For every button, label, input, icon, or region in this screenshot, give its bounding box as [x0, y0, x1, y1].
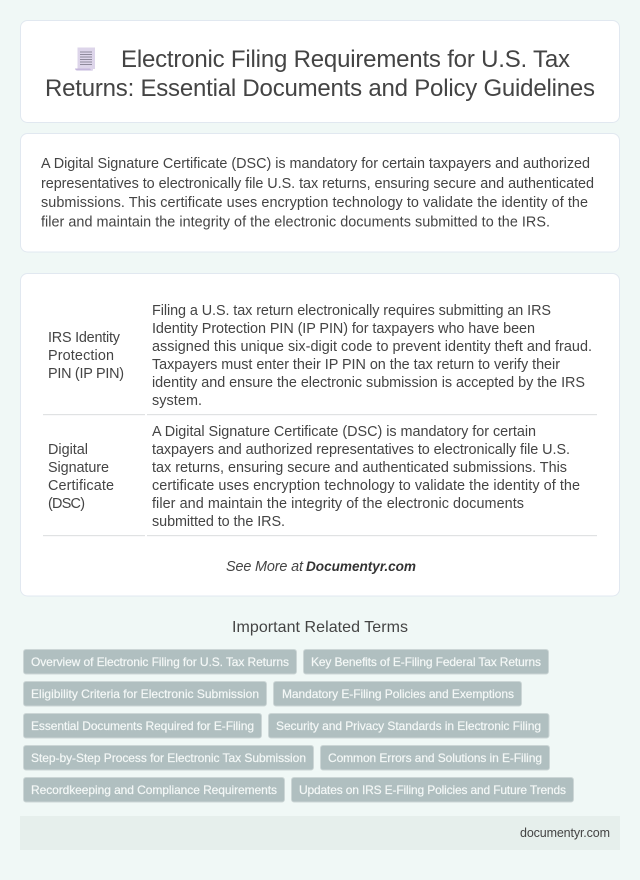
see more link: See More at [226, 559, 304, 575]
term: Digital Signature Certificate: Signature [48, 460, 109, 476]
description: Digital Signature Certificate: A Digital Signature Certificate (DSC) is mandatory for certain [152, 424, 536, 440]
description: Digital Signature Certificate: filer and maintain the integrity of the electronic documents [152, 496, 524, 512]
tag [268, 714, 549, 738]
tag: Updates on IRS E-Filing Policies and Future Trends [299, 783, 566, 797]
tag [292, 778, 574, 802]
description: Digital Signature Certificate: taxpayers and authorized representatives to electronically file U.S. [152, 442, 570, 458]
panel: introduction [20, 134, 620, 252]
title: Returns: Essential Documents and Policy Guidelines [45, 75, 595, 102]
intro paragraph: representatives to electronically file U.S. tax returns, ensuring secure and authenticated [41, 176, 594, 192]
description: Digital Signature Certificate: certificate uses encryption technology to validate the identity of the [152, 478, 580, 494]
panel: title card [20, 20, 620, 122]
description: Digital Signature Certificate: submitted to the IRS. [152, 514, 285, 530]
title: Electronic Filing Requirements for U.S. Tax [121, 46, 570, 73]
intro paragraph: submissions. This certificate uses encryption technology to validate the identity of the [41, 195, 588, 211]
term: Digital Signature Certificate: Digital [48, 442, 88, 458]
tag [304, 650, 548, 674]
see more link: Documentyr.com [306, 559, 416, 574]
tag [274, 682, 522, 706]
table row: Digital Signature Certificate [43, 424, 597, 536]
heading: related terms: Important Related Terms [232, 619, 408, 636]
term: Digital Signature Certificate: (DSC) [48, 496, 85, 512]
term: IRS Identity Protection PIN: IRS Identity [48, 330, 121, 346]
tag: Step-by-Step Process for Electronic Tax Submission [31, 751, 306, 765]
description: Digital Signature Certificate: tax returns, ensuring secure and authenticated submissions. This [152, 460, 567, 476]
tag [24, 650, 296, 674]
tag [320, 746, 550, 770]
title [45, 46, 595, 102]
icon: receipt document [75, 48, 95, 70]
term: Digital Signature Certificate [48, 442, 114, 512]
footer bar [20, 816, 620, 850]
description: IRS IP PIN: Taxpayers must enter their IP PIN on the tax return to verify their [152, 357, 560, 373]
tag: Key Benefits of E-Filing Federal Tax Returns [311, 655, 541, 669]
term: Digital Signature Certificate: Certificate [48, 478, 114, 494]
tag: Essential Documents Required for E-Filing [31, 719, 254, 733]
term: IRS Identity Protection PIN [48, 330, 124, 382]
description: IRS IP PIN: identity and ensure the electronic submission is accepted by the IRS [152, 375, 585, 391]
panel: requirements table [20, 274, 620, 596]
description: Digital Signature Certificate [152, 424, 580, 530]
tag: Overview of Electronic Filing for U.S. Tax Returns [31, 655, 289, 669]
tag [24, 778, 284, 802]
table row: IRS IP PIN [43, 303, 597, 415]
description: IRS IP PIN: assigned this unique six-digit code to prevent identity theft and fraud. [152, 339, 592, 355]
footer bar: documentyr.com [520, 826, 610, 840]
intro paragraph [41, 156, 594, 230]
tag: Common Errors and Solutions in E-Filing [328, 751, 542, 765]
tag: Eligibility Criteria for Electronic Submission [31, 687, 259, 701]
intro paragraph: filer and maintain the integrity of the electronic documents submitted to the IRS. [41, 214, 550, 230]
description: IRS IP PIN: Filing a U.S. tax return electronically requires submitting an IRS [152, 303, 551, 319]
tag: Security and Privacy Standards in Electronic Filing [276, 719, 541, 733]
tag [24, 714, 262, 738]
description: IRS IP PIN: system. [152, 393, 202, 409]
intro paragraph: A Digital Signature Certificate (DSC) is mandatory for certain taxpayers and authorized [41, 156, 590, 172]
description: IRS IP PIN [152, 303, 592, 409]
term: IRS Identity Protection PIN: Protection [48, 348, 114, 364]
tag [24, 746, 314, 770]
description: IRS IP PIN: Identity Protection PIN (IP PIN) for taxpayers who have been [152, 321, 535, 337]
tag: Mandatory E-Filing Policies and Exemptions [282, 687, 514, 701]
see more link [226, 559, 416, 575]
tag: Recordkeeping and Compliance Requirements [31, 783, 277, 797]
tag [24, 682, 266, 706]
term: IRS Identity Protection PIN: PIN (IP PIN) [48, 366, 124, 382]
related term tags [24, 650, 574, 802]
